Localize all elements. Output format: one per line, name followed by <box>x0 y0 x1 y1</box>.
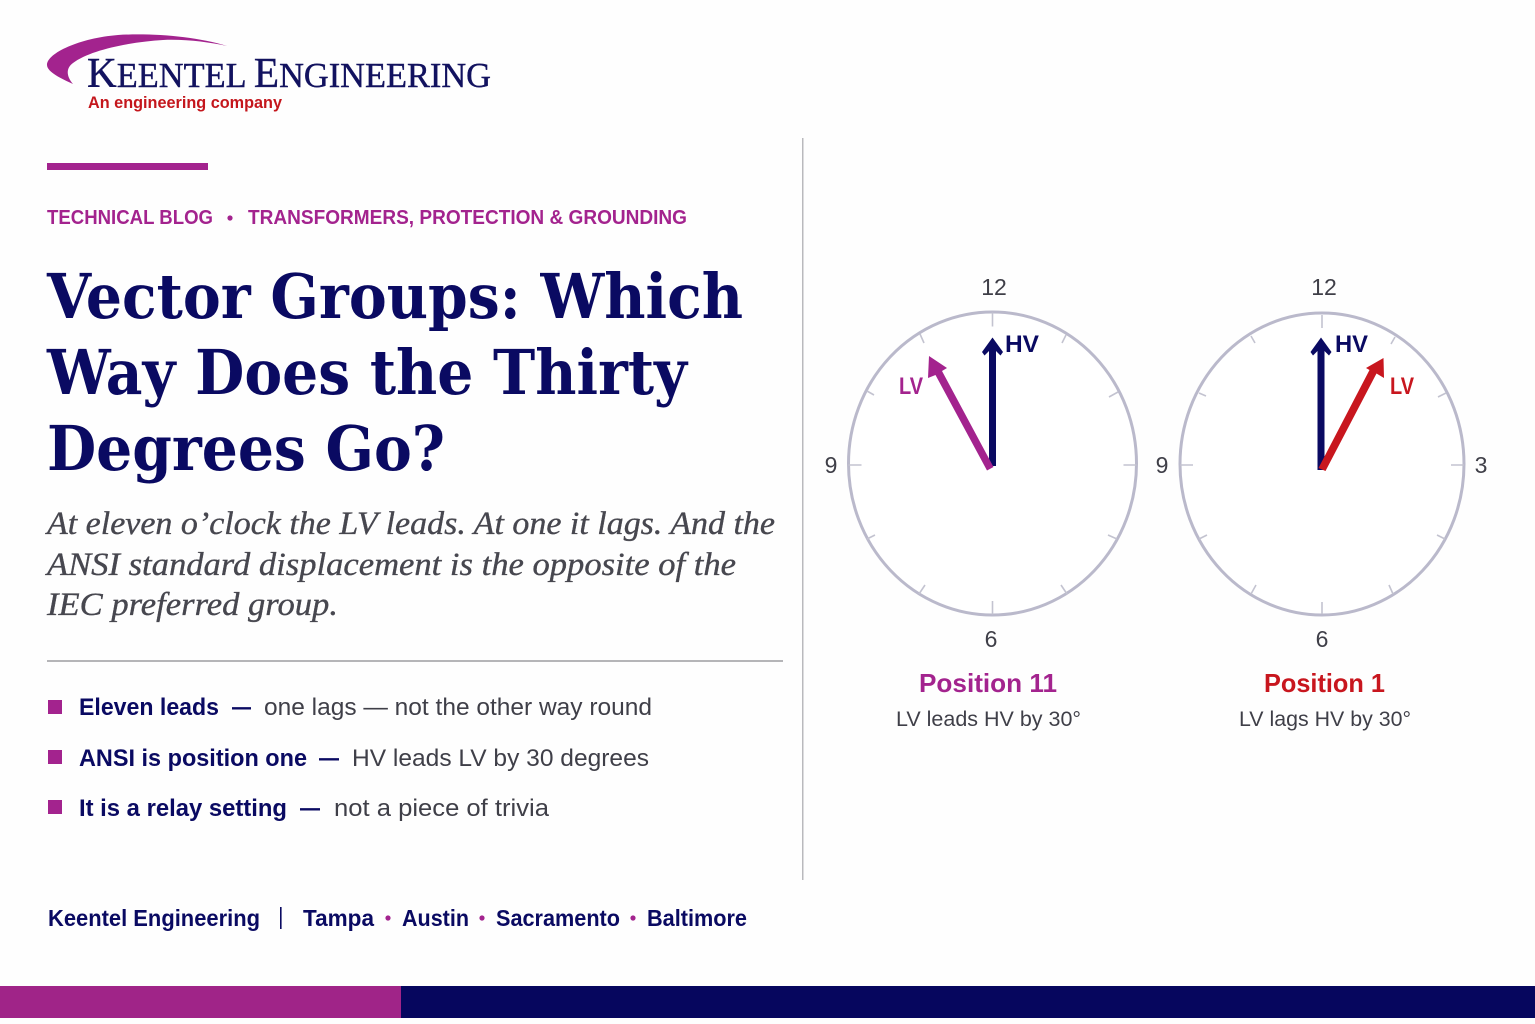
key points list <box>48 694 652 822</box>
subtitle: ANSI standard displacement is the opposite of the <box>45 547 736 583</box>
caption: position 11: Position 11 <box>919 668 1057 698</box>
bullet: relay setting: It is a relay setting <box>79 795 287 822</box>
caption: LV lags: LV lags HV by 30° <box>1239 708 1411 731</box>
bullet: ANSI is position one: — <box>319 745 339 772</box>
clock numerals: 12 <box>981 274 1007 300</box>
bullet: eleven leads: Eleven leads <box>79 694 219 721</box>
accent rule <box>47 163 208 170</box>
caption: position 1: Position 1 <box>1264 668 1385 698</box>
logo wordmark: KEENTEL ENGINEERING <box>87 51 491 97</box>
subtitle <box>45 506 775 623</box>
bullet: eleven leads: — <box>232 694 251 721</box>
clock numerals: 12 <box>1311 274 1337 300</box>
clock numerals: 3 <box>1475 452 1487 478</box>
footer locations: Austin <box>402 905 469 931</box>
subtitle: At eleven o’clock the LV leads. At one it lags. And the <box>45 506 775 542</box>
footer locations: Baltimore <box>647 905 747 931</box>
label: HV: HV <box>1005 331 1039 358</box>
subtitle: IEC preferred group. <box>46 587 338 623</box>
title: Vector Groups: Which <box>46 260 743 333</box>
eyebrow category line <box>47 207 687 229</box>
clock numerals <box>1156 274 1487 652</box>
bullet: ANSI is position one <box>48 745 649 772</box>
footer locations: Tampa <box>303 905 374 931</box>
eyebrow category line: TECHNICAL BLOG <box>47 207 213 229</box>
label: HV: HV <box>1335 331 1368 358</box>
eyebrow category line: TRANSFORMERS, PROTECTION & GROUNDING <box>248 207 687 229</box>
label: LV: LV <box>1390 373 1414 400</box>
footer locations: Keentel Engineering <box>48 905 260 931</box>
clock face <box>1180 313 1464 615</box>
caption: LV leads: LV leads HV by 30° <box>896 708 1081 731</box>
clock face <box>848 312 1136 615</box>
title: Way Does the Thirty <box>46 336 689 409</box>
clock numerals <box>825 274 1007 652</box>
arrow: HV phasor <box>982 338 1003 466</box>
bullet: ANSI is position one: HV leads LV by 30 degrees <box>352 745 649 772</box>
arrow: LV phasor leading <box>928 356 994 470</box>
title <box>46 260 743 485</box>
clock: position 1 <box>1156 274 1487 731</box>
label: LV: LV <box>899 373 923 400</box>
bullet: relay setting: — <box>300 795 320 822</box>
bullet: relay setting: not a piece of trivia <box>334 795 550 822</box>
bullet: eleven leads: one lags — not the other way round <box>264 694 652 721</box>
clock numerals: 9 <box>825 452 837 478</box>
clock numerals: 6 <box>985 626 997 652</box>
bottom colour band <box>0 986 1535 1018</box>
clock numerals: 6 <box>1316 626 1328 652</box>
footer locations <box>48 905 747 931</box>
icon: logo swoosh <box>47 34 227 84</box>
logo tagline: An engineering company <box>88 93 283 112</box>
bullet: relay setting <box>48 795 550 822</box>
logo: Keentel Engineering <box>47 34 491 112</box>
arrow: HV phasor <box>1310 338 1332 470</box>
arrow: LV phasor lagging <box>1318 358 1384 471</box>
clock: position 11 <box>825 274 1136 731</box>
title: Degrees Go? <box>47 412 445 485</box>
footer locations: Sacramento <box>496 905 620 931</box>
bullet: eleven leads <box>48 694 652 721</box>
bullet: ANSI is position one: ANSI is position one <box>79 745 307 772</box>
clock numerals: 9 <box>1156 452 1168 478</box>
